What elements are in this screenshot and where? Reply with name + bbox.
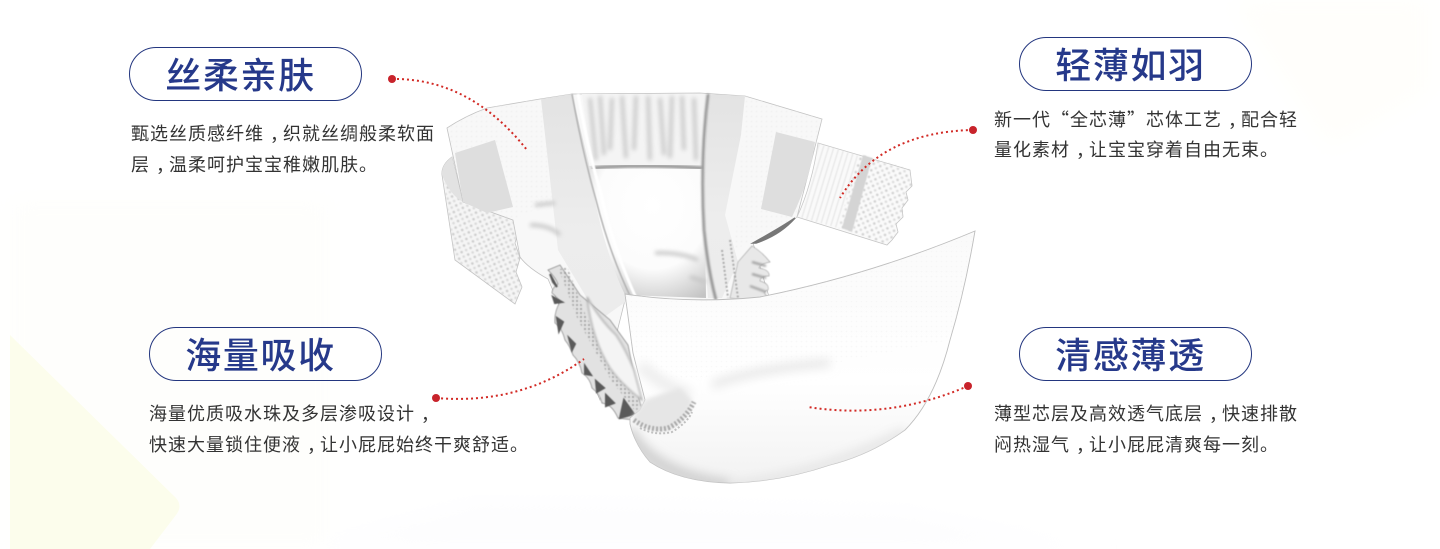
elastic ruffle left — [548, 265, 642, 420]
heading: 清感薄透 — [1019, 327, 1252, 381]
left ear tape patch — [455, 140, 513, 213]
text: 丝柔亲肤 description — [131, 120, 435, 178]
text: 清感薄透 description: 闷热湿气 ，让小屁屁清爽每一刻。 — [994, 431, 1279, 458]
heading: 轻薄如羽 — [1019, 37, 1252, 91]
text: 海量吸收 description — [149, 400, 529, 458]
right fastening tab — [797, 143, 912, 245]
text: 轻薄如羽 description: 量化素材 ，让宝宝穿着自由无束。 — [994, 136, 1279, 163]
text: 丝柔亲肤 description: 层 ，温柔呵护宝宝稚嫩肌肤。 — [131, 151, 378, 178]
text: 海量吸收 description: 快速大量锁住便液 ，让小屁屁始终干爽舒适。 — [149, 431, 529, 458]
heading: 清感薄透: 清感薄透 — [1055, 327, 1206, 379]
heading: 丝柔亲肤 — [129, 47, 362, 101]
leader line: thin core — [840, 126, 977, 198]
crease shadows — [530, 203, 706, 282]
leader line: silky top layer — [388, 75, 527, 150]
main body of diaper — [447, 93, 822, 400]
gathered waistband — [582, 94, 706, 168]
right ear tape patch — [761, 132, 815, 217]
text: 轻薄如羽 description — [994, 106, 1298, 163]
text: 海量吸收 description: 海量优质吸水珠及多层渗吸设计 ， — [149, 400, 440, 427]
elastic ruffle right — [722, 240, 770, 301]
left side strip — [541, 94, 628, 320]
diaper illustration — [388, 75, 977, 484]
front panel — [625, 231, 975, 486]
heading: 丝柔亲肤: 丝柔亲肤 — [165, 47, 316, 99]
leader line: breathable — [808, 382, 972, 411]
heading: 海量吸收 — [149, 327, 382, 381]
leader line: absorbency — [432, 359, 584, 402]
text: 清感薄透 description: 薄型芯层及高效透气底层 ，快速排散 — [994, 400, 1298, 427]
inner absorbent panel — [588, 166, 706, 298]
right side strip — [702, 94, 745, 298]
heading: 海量吸收: 海量吸收 — [185, 327, 336, 379]
left wrap-around tab — [442, 157, 522, 304]
text: 丝柔亲肤 description: 甄选丝质感纤维 ，织就丝绸般柔软面 — [131, 120, 435, 147]
text: 清感薄透 description — [994, 400, 1298, 458]
text: 轻薄如羽 description: 新一代“全芯薄”芯体工艺 ，配合轻 — [994, 106, 1298, 133]
heading: 轻薄如羽: 轻薄如羽 — [1055, 37, 1206, 89]
